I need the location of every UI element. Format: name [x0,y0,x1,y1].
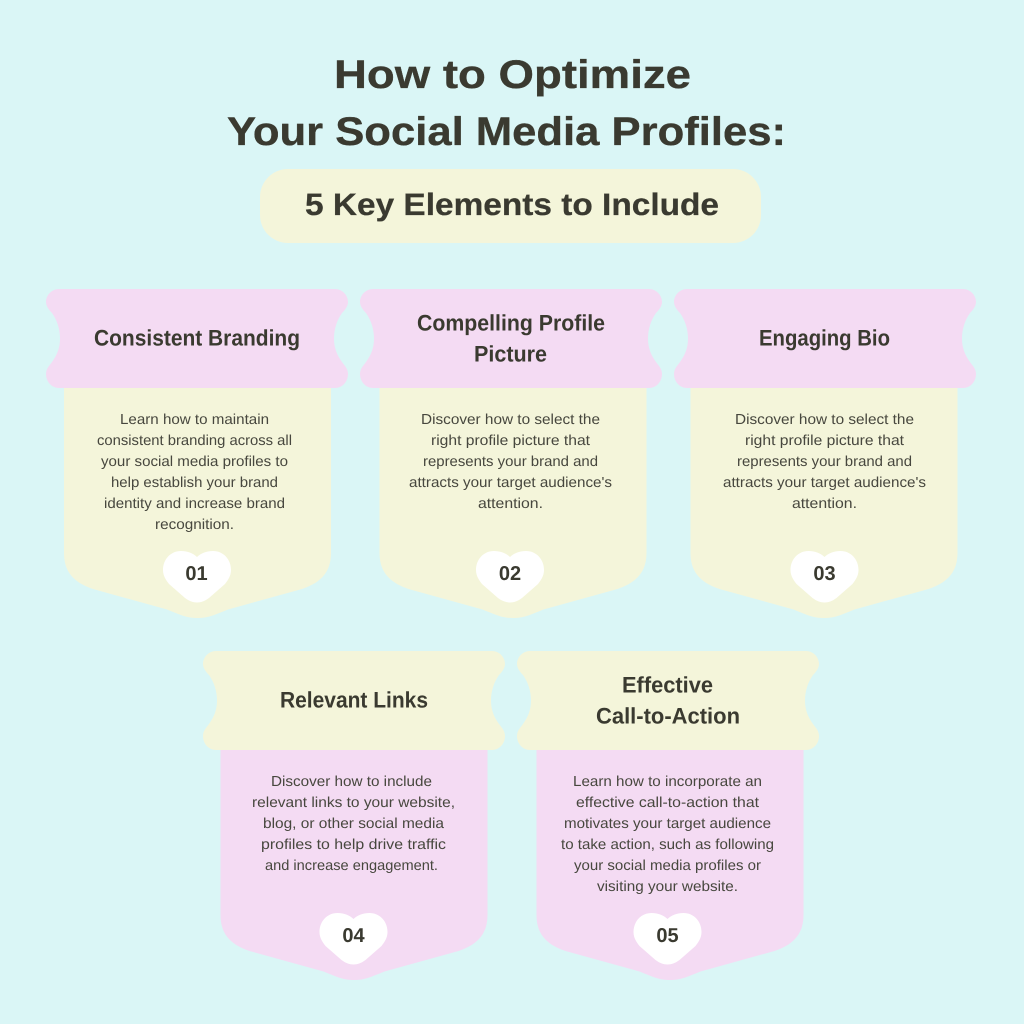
panel: card 02 compelling profile picture [360,289,662,618]
title: Your Social Media Profiles: [227,110,786,154]
description 01 [97,412,292,533]
panel: card 04 relevant links: Relevant Links [280,688,428,712]
description 02 [409,412,612,512]
number badge 02 [476,551,544,602]
description 04: blog, or other social media [263,816,445,832]
description 03: attention. [792,496,857,512]
title [227,53,786,154]
panel: card 05 effective call-to-action: Call-to-Action [596,704,740,728]
description 05: visiting your website. [597,879,738,895]
description 04: relevant links to your website, [252,795,455,811]
description 05: motivates your target audience [564,816,771,832]
description 02: right profile picture that [431,433,590,449]
title: How to Optimize [334,53,691,97]
description 04 [252,774,455,874]
panel: card 01 consistent branding [46,289,348,618]
description 03: represents your brand and [737,454,912,470]
description 05: effective call-to-action that [576,795,759,811]
description 01: your social media profiles to [101,454,288,470]
description 04: Discover how to include [271,774,432,790]
description 03: Discover how to select the [735,412,914,428]
description 02: attention. [478,496,543,512]
description 04: profiles to help drive traffic [261,837,446,853]
panel: card 03 engaging bio [674,289,976,618]
panel: card 01 consistent branding: Consistent Branding [94,326,300,350]
number badge 05 [634,913,702,964]
number badge 04 [320,913,388,964]
number badge 01: 01 [185,563,208,585]
description 05: your social media profiles or [574,858,761,874]
description 05: Learn how to incorporate an [573,774,762,790]
description 01: identity and increase brand [104,496,285,512]
panel: card 03 engaging bio: Engaging Bio [759,326,890,350]
panel: card 02 compelling profile picture: Compelling Profile [417,310,605,336]
description 03: right profile picture that [745,433,904,449]
description 03: attracts your target audience's [723,475,926,491]
number badge 02: 02 [499,563,521,585]
description 02: Discover how to select the [421,412,600,428]
description 02: attracts your target audience's [409,475,612,491]
number badge 03 [790,551,858,602]
number badge 05: 05 [656,925,679,947]
description 02: represents your brand and [423,454,598,470]
number badge 01 [163,551,231,602]
number badge 03: 03 [813,563,836,585]
panel: card 02 compelling profile picture: Picture [474,342,547,366]
description 01: help establish your brand [111,475,278,491]
panel: card 05 effective call-to-action: Effective [622,672,713,698]
panel: card 05 effective call-to-action [517,651,819,980]
description 05 [561,774,774,895]
description 05: to take action, such as following [561,837,774,853]
description 01: recognition. [155,517,234,533]
subtitle pill [260,169,761,243]
description 01: consistent branding across all [97,433,292,449]
number badge 04: 04 [342,925,365,947]
description 01: Learn how to maintain [120,412,269,428]
panel: card 04 relevant links [203,651,505,980]
description 04: and increase engagement. [265,858,438,874]
subtitle pill: 5 Key Elements to Include [305,187,719,222]
description 03 [723,412,926,512]
